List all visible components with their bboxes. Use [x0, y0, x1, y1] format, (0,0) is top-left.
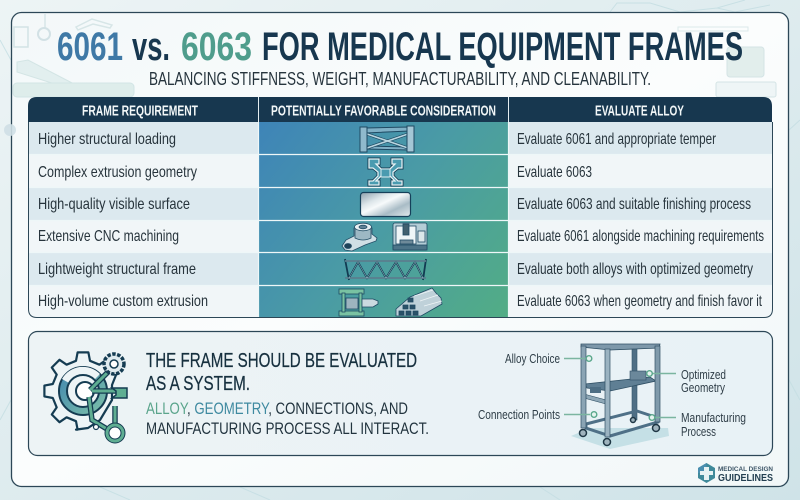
faint monitor watermark — [678, 27, 776, 97]
icon: truss — [345, 259, 426, 280]
title: vs. — [132, 25, 170, 69]
callout: alloy choice: Alloy Choice — [505, 351, 560, 366]
frame cart diagram — [571, 344, 669, 449]
frame requirement column: Complex extrusion geometry — [38, 164, 197, 181]
casters — [580, 418, 660, 446]
table header — [28, 97, 772, 122]
table outline — [28, 122, 772, 318]
panel body text: MANUFACTURING PROCESS ALL INTERACT. — [146, 419, 429, 438]
back leg — [632, 348, 637, 420]
top frame — [581, 344, 660, 350]
icon: stacked extrusions — [396, 288, 442, 316]
callout: manufacturing process: Manufacturing — [681, 410, 746, 425]
small gear — [104, 354, 124, 374]
frame requirement column: High-quality visible surface — [38, 196, 190, 213]
lower shelf — [586, 411, 658, 436]
callout: optimized geometry: Geometry — [681, 380, 725, 395]
callout: optimized geometry: Optimized — [681, 367, 726, 382]
gradient column — [259, 122, 508, 317]
panel body text: ALLOY, GEOMETRY, CONNECTIONS, AND — [146, 399, 408, 418]
callout: manufacturing process: Process — [681, 424, 716, 439]
table header: FRAME REQUIREMENT — [82, 102, 198, 120]
panel heading — [146, 349, 417, 395]
frame requirement column: High-volume custom extrusion — [38, 293, 208, 310]
panel body text — [146, 399, 429, 438]
shadow — [571, 428, 669, 449]
logo: medical design guidelines: GUIDELINES — [718, 473, 773, 484]
table rows background — [29, 122, 772, 317]
logo: medical design guidelines: MEDICAL DESIGN — [718, 466, 773, 473]
connector lines — [89, 369, 118, 432]
icon: CNC machine — [393, 223, 427, 250]
icon: polished surface — [360, 192, 410, 216]
wrench end — [112, 388, 127, 398]
large gear — [44, 352, 116, 430]
evaluate alloy column — [517, 131, 764, 310]
icon: extrusion press — [339, 289, 378, 316]
panel heading: AS A SYSTEM. — [146, 372, 250, 395]
node ring — [107, 425, 123, 441]
icon: extrusion profile — [369, 159, 402, 185]
callout: connection points: Connection Points — [478, 407, 560, 422]
faint hospital bed watermark — [4, 14, 134, 136]
frame requirement column: Extensive CNC machining — [38, 228, 179, 245]
table header: EVALUATE ALLOY — [595, 102, 684, 120]
row separators — [29, 122, 772, 317]
title — [57, 25, 743, 69]
icon: gear system — [44, 352, 127, 441]
callout: optimized geometry — [647, 367, 726, 395]
middle shelf — [585, 377, 656, 391]
frame requirement column: Higher structural loading — [38, 131, 176, 148]
title: 6063 — [181, 25, 252, 69]
callout: manufacturing process — [649, 410, 746, 439]
icon: machined bracket — [342, 223, 377, 251]
frame requirement column — [38, 131, 208, 310]
frame requirement column: Lightweight structural frame — [38, 261, 196, 278]
evaluate alloy column: Evaluate 6061 and appropriate temper — [517, 131, 716, 148]
evaluate alloy column: Evaluate 6063 — [517, 164, 592, 181]
table header: POTENTIALLY FAVORABLE CONSIDERATION — [271, 102, 496, 120]
panel heading: THE FRAME SHOULD BE EVALUATED — [146, 349, 417, 372]
logo: medical design guidelines — [698, 463, 773, 484]
summary panel — [28, 332, 772, 456]
title: 6061 — [57, 25, 123, 69]
legs — [581, 346, 586, 428]
icon: braced frame — [360, 126, 414, 152]
comparison table — [28, 97, 772, 318]
